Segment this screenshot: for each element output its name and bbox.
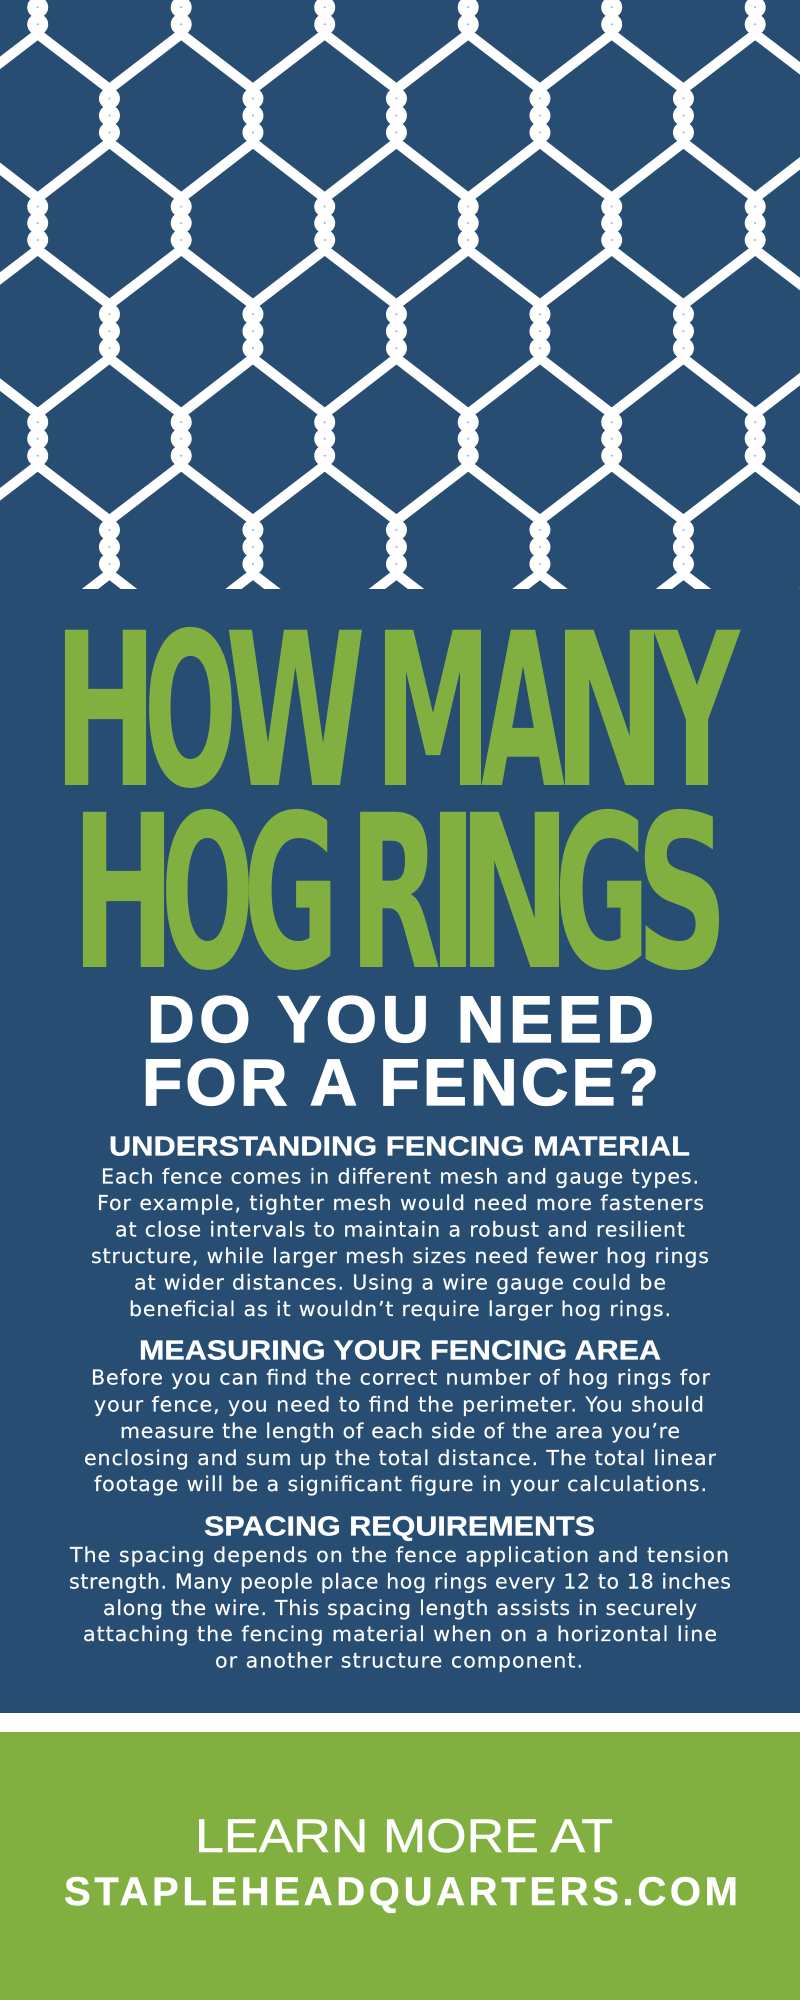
title: how many hog rings: R [349,769,441,1018]
body text: spacing requirements: along the wire. This spacing length assists in securely [103,1596,697,1620]
chain-link fence mesh [0,0,800,682]
title: how many hog rings: M [374,587,492,836]
body text: understanding fencing material: at wider distances. Using a wire gauge could be [134,1270,666,1294]
section: understanding fencing material [91,1130,709,1321]
title: how many hog rings: O [144,589,237,836]
body text: measuring your fencing area: measure the length of each side of the area you’re [120,1419,680,1443]
subtitle [142,982,659,1119]
body text: spacing requirements: The spacing depends on the fence application and tension [69,1543,729,1567]
heading: understanding fencing material: UNDERSTANDING FENCING MATERIAL [109,1130,690,1162]
body text: understanding fencing material: For example, tighter mesh would need more fasteners [97,1191,704,1215]
body text: understanding fencing material: Each fence comes in different mesh and gauge types. [101,1164,699,1188]
subtitle: FOR A FENCE? [142,1045,659,1119]
title: how many hog rings: N [457,770,572,1018]
body text: understanding fencing material: at close intervals to maintain a robust and resilient [115,1218,685,1242]
call to action text [64,1809,738,1914]
body text: understanding fencing material [91,1164,709,1321]
title: how many hog rings: Y [653,587,741,836]
title: how many hog rings: S [636,770,728,1018]
title: how many hog rings: I [427,770,479,1018]
call to action text: LEARN MORE AT [195,1809,613,1862]
body text: understanding fencing material: beneficial as it wouldn’t require larger hog rings. [129,1297,671,1321]
heading: spacing requirements: SPACING REQUIREMENTS [204,1510,595,1542]
body text: spacing requirements: strength. Many people place hog rings every 12 to 18 inches [69,1570,731,1594]
section: spacing requirements [69,1510,731,1672]
body text: measuring your fencing area: Before you can find the correct number of hog rings for [91,1366,711,1390]
body text: spacing requirements: attaching the fencing material when on a horizontal line [83,1622,717,1646]
panel: white divider band [0,1713,800,1732]
call to action text: STAPLEHEADQUARTERS.COM [64,1870,738,1914]
title: how many hog rings: G [243,770,339,1018]
title: how many hog rings: H [72,770,175,1018]
title: how many hog rings: G [554,770,650,1018]
heading: measuring your fencing area: MEASURING YOUR FENCING AREA [139,1334,661,1366]
panel: green footer [0,1732,800,2000]
body text: spacing requirements [69,1543,731,1672]
title: how many hog rings: N [552,588,667,836]
body text: spacing requirements: or another structure component. [215,1648,583,1672]
body text: measuring your fencing area: enclosing and sum up the total distance. The total linear [84,1446,717,1470]
title: how many hog rings: W [225,589,366,836]
section: measuring your fencing area [84,1334,717,1496]
body text: measuring your fencing area [84,1366,717,1496]
body text: understanding fencing material: structure, while larger mesh sizes need fewer hog rings [91,1244,709,1268]
subtitle: DO YOU NEED [147,982,654,1056]
body text: measuring your fencing area: footage will be a significant figure in your calculations. [94,1472,707,1496]
title: how many hog rings: A [481,587,565,835]
title: how many hog rings: H [54,588,157,836]
body text: measuring your fencing area: your fence, you need to find the perimeter. You should [94,1392,704,1416]
title: how many hog rings [54,587,741,1018]
title: how many hog rings: O [161,771,254,1018]
